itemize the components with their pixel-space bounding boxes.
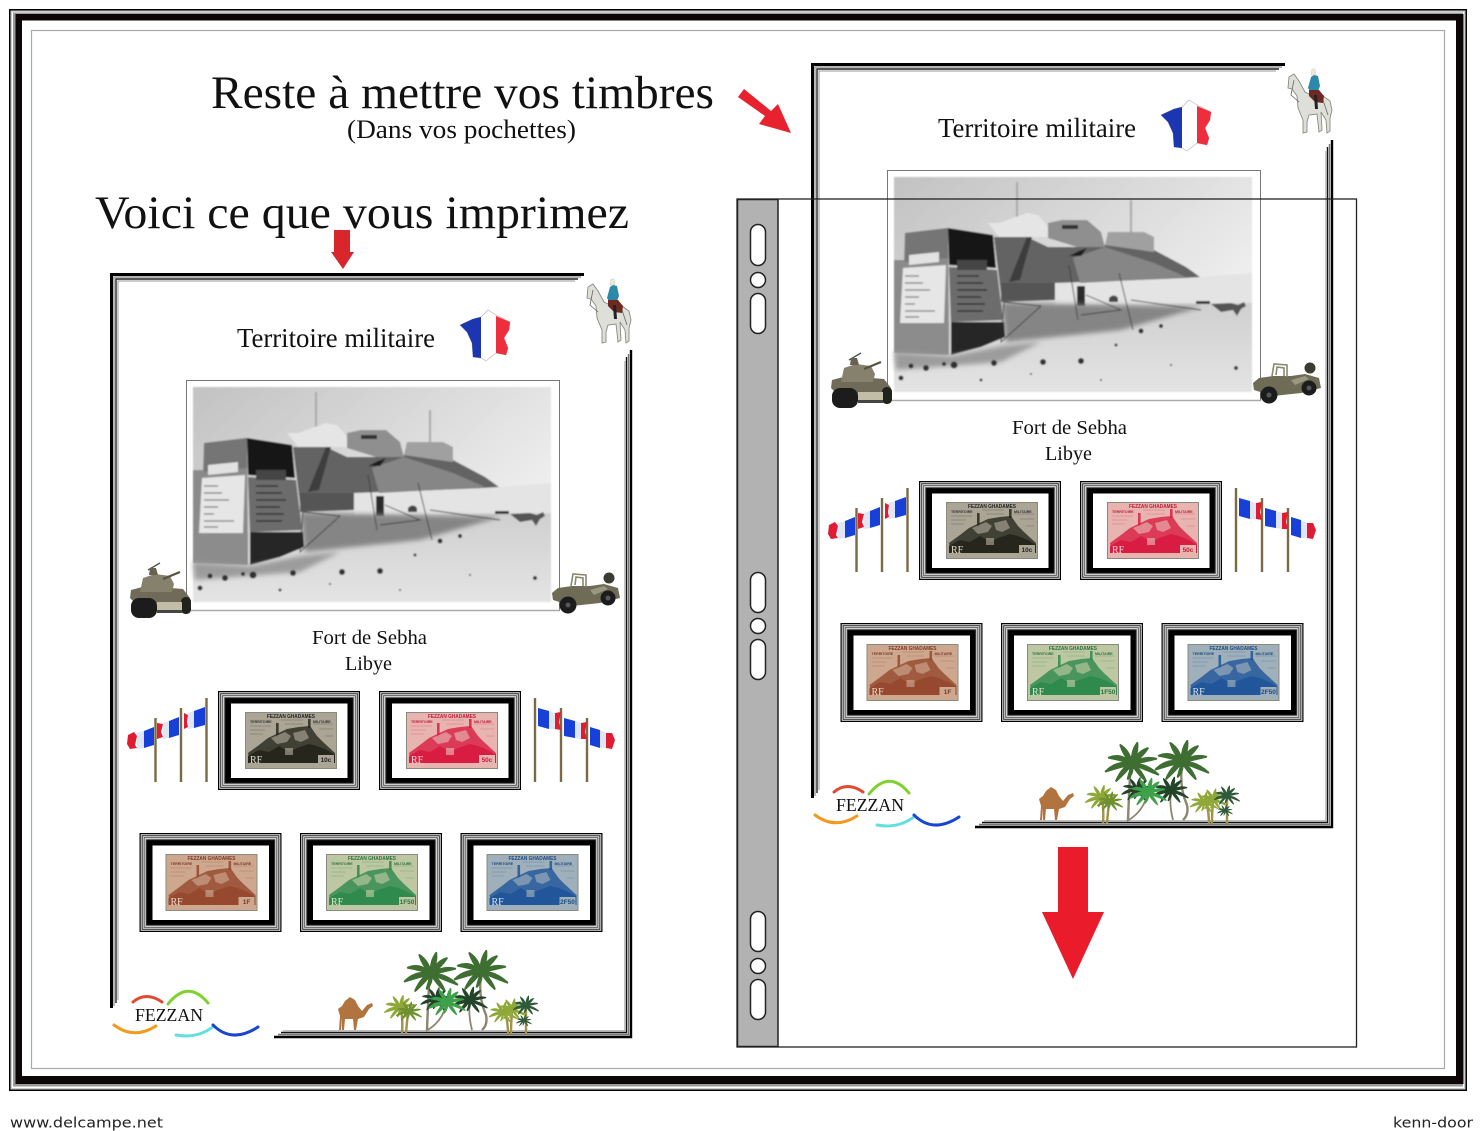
stamp frame: black 10c: RF — [250, 755, 263, 766]
heading: reste a mettre vos timbres: Reste à mettre vos timbres — [211, 67, 714, 119]
icon: flags left — [127, 698, 206, 782]
stamp frame: brown 1f: TERRITOIRE — [170, 862, 193, 866]
sleeve binding strip with punch holes — [738, 200, 778, 1046]
stamp frame: brown 1f: FEZZAN GHADAMES — [188, 856, 236, 862]
page title: Territoire militaire — [237, 323, 435, 353]
stamp frame: green 1f50: RF — [331, 897, 344, 908]
subheading: dans vos pochettes: (Dans vos pochettes) — [347, 115, 576, 144]
stamp frame: blue 2f50: TERRITOIRE — [1192, 652, 1215, 656]
stamp frame: green 1f50: 1F50 — [1101, 689, 1116, 696]
stamp frame: red 50c: MILITAIRE — [474, 720, 492, 724]
stamp frame: green 1f50: TERRITOIRE — [1032, 652, 1054, 656]
stamp frame: brown 1f: FEZZAN GHADAMES — [888, 646, 937, 652]
icon: jeep — [1253, 362, 1321, 404]
panel: printed page left — [112, 274, 631, 1037]
icon: palm grove — [384, 951, 538, 1034]
stamp frame: blue 2f50: RF — [1192, 687, 1205, 698]
arrow: down to printed page — [331, 230, 354, 269]
stamp frame: blue 2f50: RF — [492, 897, 504, 908]
page title: Territoire militaire — [938, 113, 1136, 143]
icon: camel — [338, 997, 373, 1030]
stamp frame: brown 1f: RF — [170, 897, 183, 908]
stamp frame: black 10c: MILITAIRE — [313, 720, 331, 724]
panel: plastic sleeve — [737, 199, 1356, 1047]
stamp frame: red 50c: 50c — [482, 757, 493, 764]
stamp frame: blue 2f50: MILITAIRE — [1256, 652, 1274, 656]
stamp frame: brown 1f — [140, 833, 282, 932]
stamp frame: black 10c: FEZZAN GHADAMES — [267, 714, 316, 720]
stamp frame: blue 2f50: TERRITOIRE — [492, 862, 514, 866]
stamp frame: black 10c: FEZZAN GHADAMES — [968, 504, 1017, 510]
icon: tank — [130, 563, 191, 618]
stamp frame: black 10c: TERRITOIRE — [250, 720, 272, 724]
photo: fort de sebha — [887, 170, 1261, 400]
caption: libye: Libye — [345, 653, 392, 675]
stamp frame: green 1f50 — [1001, 623, 1143, 722]
stamp frame: brown 1f: 1F — [243, 899, 250, 906]
stamp frame: red 50c: FEZZAN GHADAMES — [428, 714, 477, 720]
stamp frame: green 1f50: MILITAIRE — [394, 862, 412, 866]
stamp frame: red 50c: TERRITOIRE — [1112, 510, 1134, 514]
stamp frame: black 10c: MILITAIRE — [1014, 510, 1032, 514]
page frame — [812, 64, 1332, 827]
stamp frame: blue 2f50 — [1162, 623, 1304, 722]
logo: fezzan — [815, 781, 959, 826]
stamp frame: blue 2f50: 2F50 — [560, 899, 575, 906]
arrow: big red down — [1042, 847, 1104, 979]
icon: tank — [831, 353, 892, 408]
stamp frame: red 50c: RF — [1112, 545, 1125, 556]
stamp frame: black 10c — [919, 481, 1061, 580]
stamp frame: green 1f50: TERRITOIRE — [331, 862, 353, 866]
stamp frame: brown 1f: MILITAIRE — [934, 652, 953, 656]
arrow: diagonal to right page — [738, 89, 791, 133]
caption: fort de sebha: Fort de Sebha — [312, 627, 427, 649]
caption: libye: Libye — [1045, 443, 1092, 465]
stamp frame: blue 2f50: FEZZAN GHADAMES — [508, 856, 557, 862]
caption: fort de sebha: Fort de Sebha — [1012, 417, 1127, 439]
stamp frame: brown 1f: MILITAIRE — [234, 862, 252, 866]
icon: horseman — [587, 279, 631, 343]
stamp frame: red 50c: 50c — [1183, 547, 1194, 554]
stamp frame: green 1f50: FEZZAN GHADAMES — [348, 856, 397, 862]
icon: flags right — [535, 698, 615, 782]
stamp frame: green 1f50: FEZZAN GHADAMES — [1049, 646, 1098, 652]
stamp frame: brown 1f: TERRITOIRE — [872, 652, 894, 656]
icon: france flag map — [1161, 100, 1211, 151]
icon: flags right — [1236, 488, 1316, 572]
heading: voici ce que vous imprimez: Voici ce que vous imprimez — [95, 187, 629, 239]
stamp frame: blue 2f50: 2F50 — [1261, 689, 1276, 696]
stamp frame: red 50c: FEZZAN GHADAMES — [1129, 504, 1178, 510]
stamp frame: black 10c: 10c — [1022, 547, 1033, 554]
page frame — [112, 274, 631, 1037]
stamp frame: red 50c — [1080, 481, 1222, 580]
stamp frame: blue 2f50: MILITAIRE — [554, 862, 573, 866]
photo: fort de sebha — [186, 380, 560, 610]
stamp frame: black 10c: TERRITOIRE — [951, 510, 973, 514]
logo: fezzan: FEZZAN — [836, 795, 904, 815]
stamp frame: blue 2f50 — [460, 833, 602, 932]
logo: fezzan — [114, 991, 258, 1036]
stamp frame: brown 1f: 1F — [944, 689, 951, 696]
stamp frame: red 50c: RF — [411, 755, 424, 766]
icon: palm grove — [1086, 741, 1240, 824]
panel: printed page right inside sleeve — [812, 64, 1332, 827]
icon: jeep — [552, 572, 620, 614]
stamp frame: red 50c: TERRITOIRE — [411, 720, 433, 724]
stamp frame: black 10c: 10c — [321, 757, 332, 764]
stamp frame: green 1f50: 1F50 — [400, 899, 415, 906]
stamp frame: red 50c: MILITAIRE — [1175, 510, 1193, 514]
icon: france flag map — [460, 310, 510, 361]
stamp frame: blue 2f50: FEZZAN GHADAMES — [1210, 646, 1258, 652]
logo: fezzan: FEZZAN — [135, 1005, 203, 1025]
stamp frame: brown 1f: RF — [872, 687, 884, 698]
stamp frame: green 1f50: RF — [1032, 687, 1045, 698]
stamp frame: green 1f50 — [300, 833, 442, 932]
icon: horseman — [1288, 69, 1332, 133]
icon: flags left — [828, 488, 908, 572]
stamp frame: brown 1f — [840, 623, 982, 722]
stamp frame: green 1f50: MILITAIRE — [1095, 652, 1113, 656]
icon: camel — [1039, 787, 1074, 820]
stamp frame: black 10c — [218, 691, 360, 790]
stamp frame: black 10c: RF — [951, 545, 964, 556]
stamp frame: red 50c — [379, 691, 521, 790]
